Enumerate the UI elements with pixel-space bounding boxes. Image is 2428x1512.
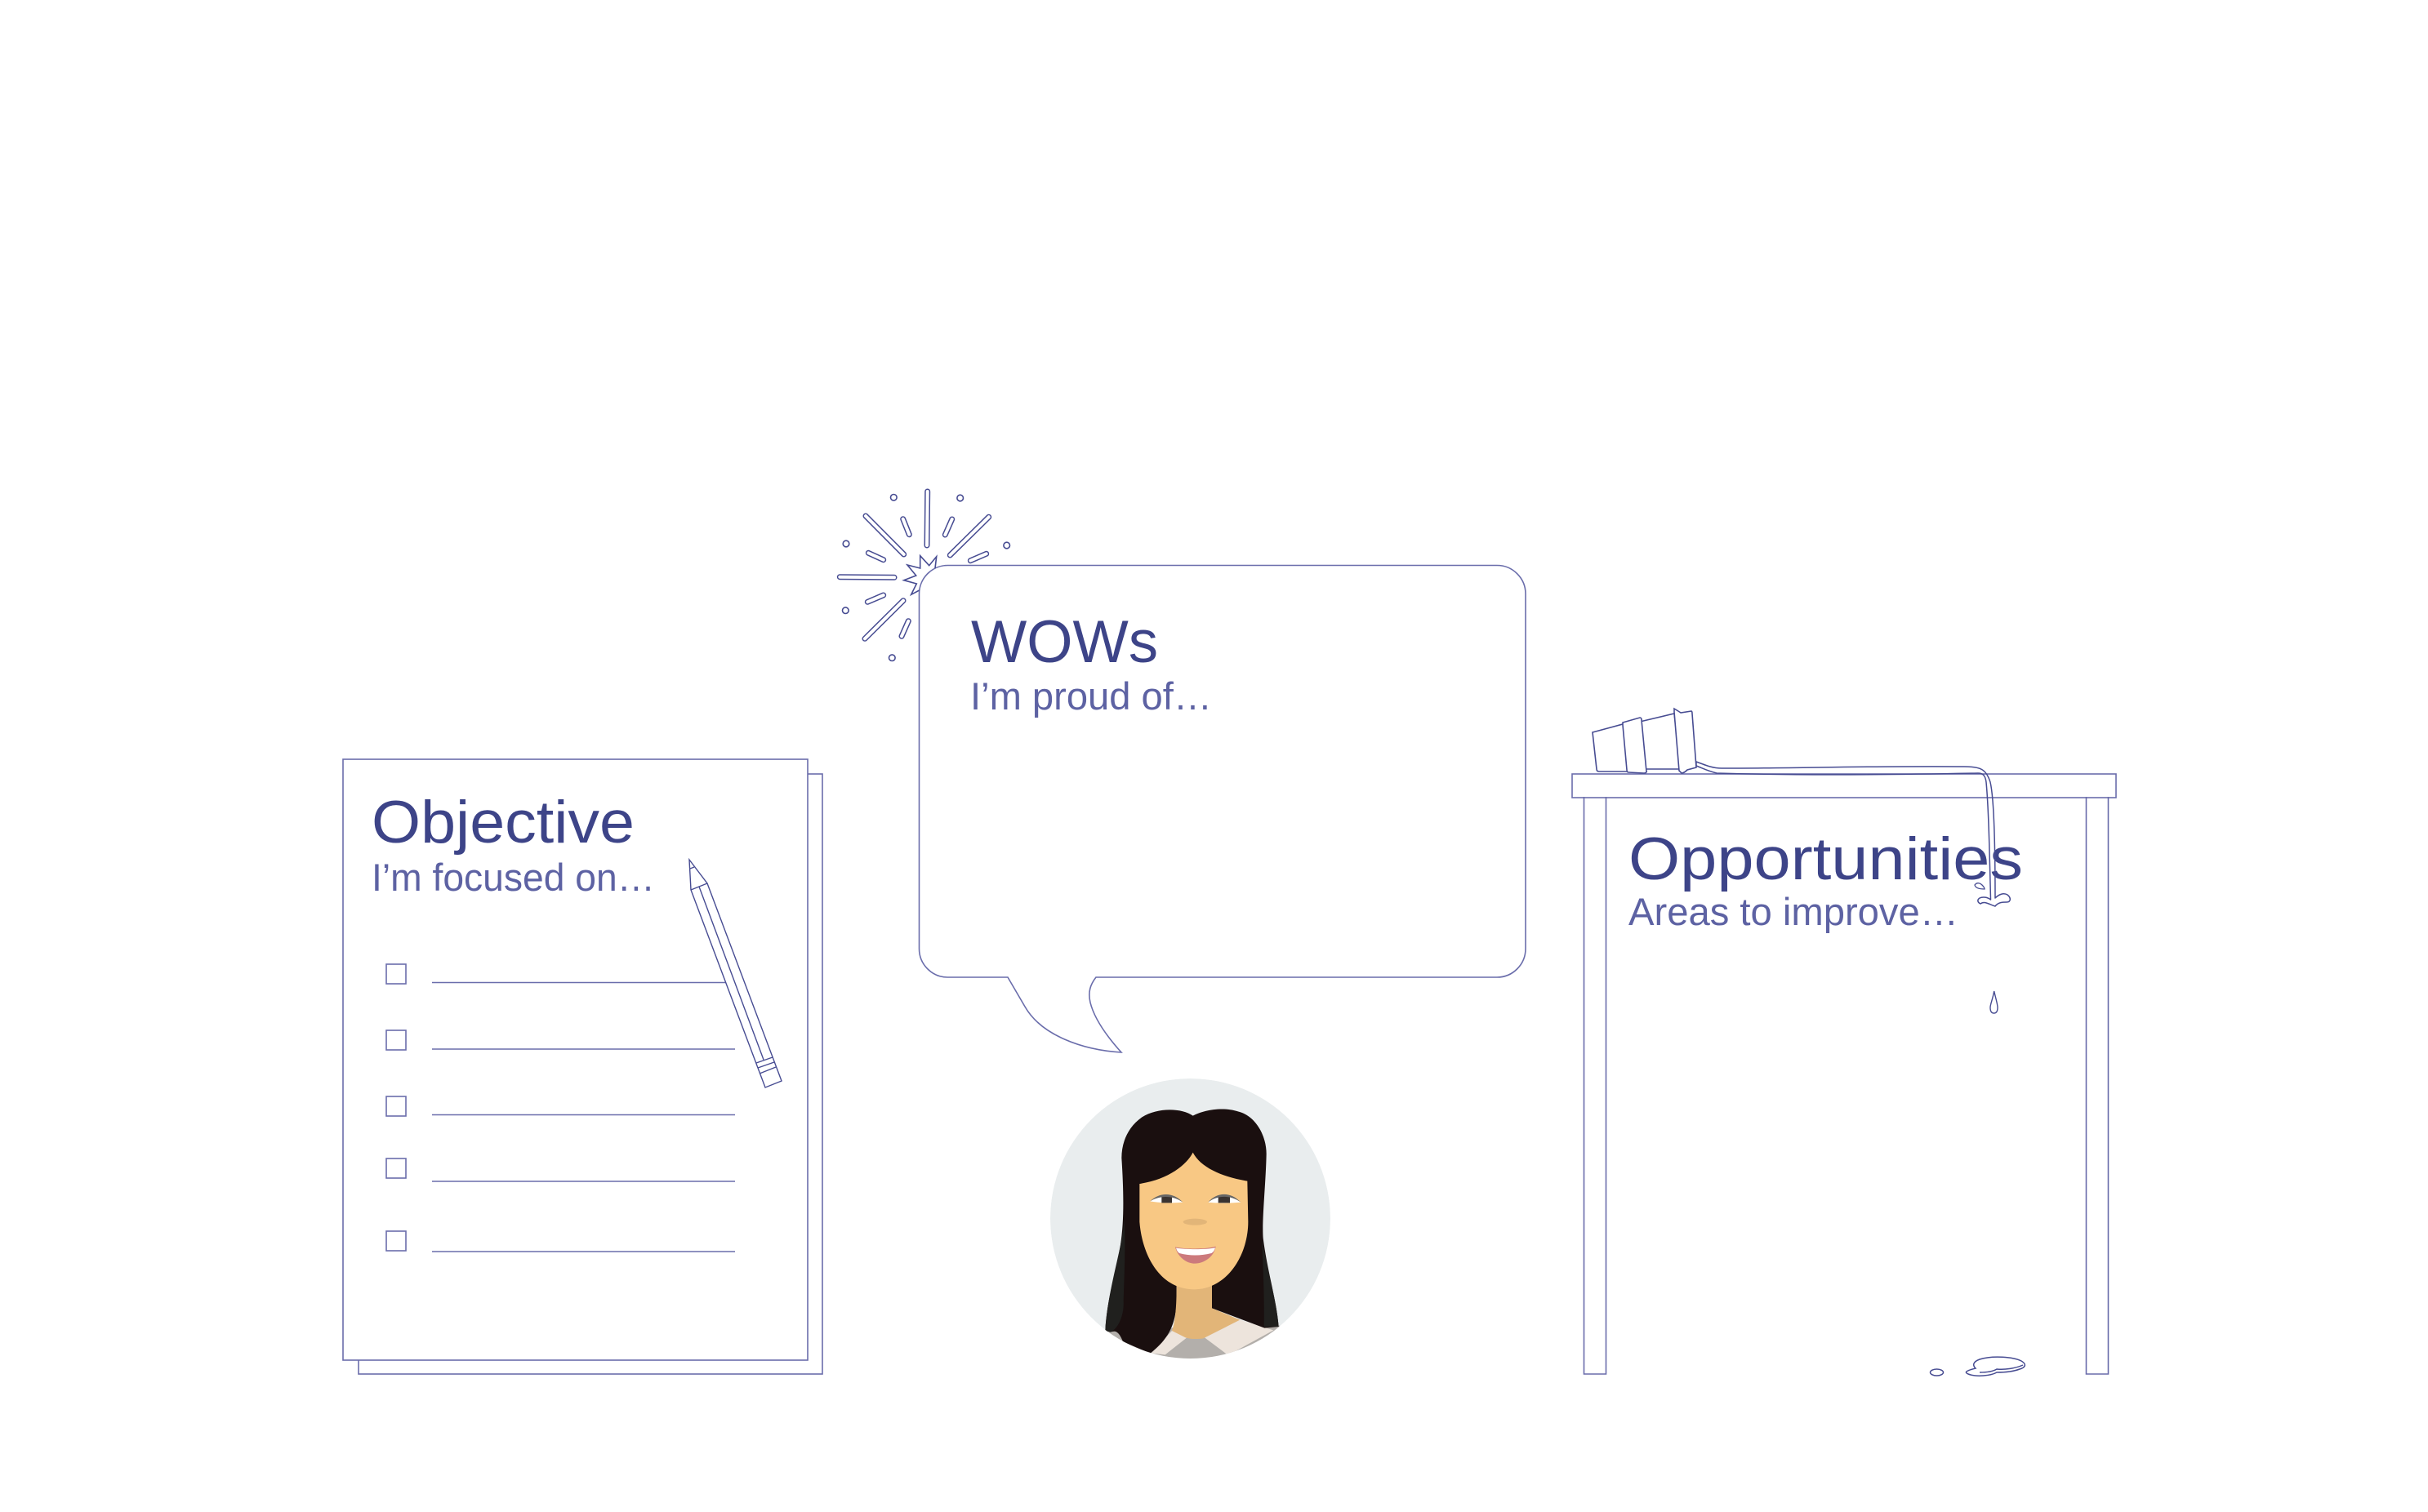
droplet near splash — [1975, 883, 1985, 889]
puddle — [1931, 1357, 2025, 1376]
front sheet — [343, 759, 808, 1360]
neck — [1172, 1284, 1240, 1339]
face — [1139, 1153, 1248, 1289]
heading: WOWs: WOWs — [971, 609, 1158, 675]
panel: opportunities table — [1572, 709, 2116, 1376]
subheading: areas to improve: Areas to improve… — [1628, 890, 1958, 933]
nose — [1183, 1219, 1207, 1225]
heading: Opportunities: Opportunities — [1628, 826, 2023, 892]
eyes — [1150, 1197, 1241, 1203]
table top — [1572, 774, 2116, 798]
table legs — [1584, 797, 2109, 1374]
falling drop — [1990, 991, 1998, 1013]
subheading: focused on: I’m focused on… — [372, 856, 655, 899]
icon: pencil — [689, 860, 782, 1087]
spilled liquid — [1696, 762, 2010, 906]
heading: Objective: Objective — [372, 789, 635, 856]
mouth — [1175, 1247, 1216, 1264]
icon: tipped cup — [1593, 709, 1696, 773]
shirt — [1105, 1325, 1280, 1362]
avatar: smiling woman — [1050, 1078, 1330, 1362]
panel: WOWs speech bubble — [840, 491, 1526, 1052]
bubble outline — [919, 565, 1526, 1052]
back sheet — [359, 774, 822, 1374]
icon: burst — [840, 491, 1009, 661]
panel: objective checklist — [343, 759, 822, 1374]
subheading: proud of: I’m proud of… — [970, 674, 1212, 718]
checklist lines — [432, 983, 735, 1252]
checkboxes — [386, 964, 406, 1251]
hair — [1105, 1110, 1279, 1354]
